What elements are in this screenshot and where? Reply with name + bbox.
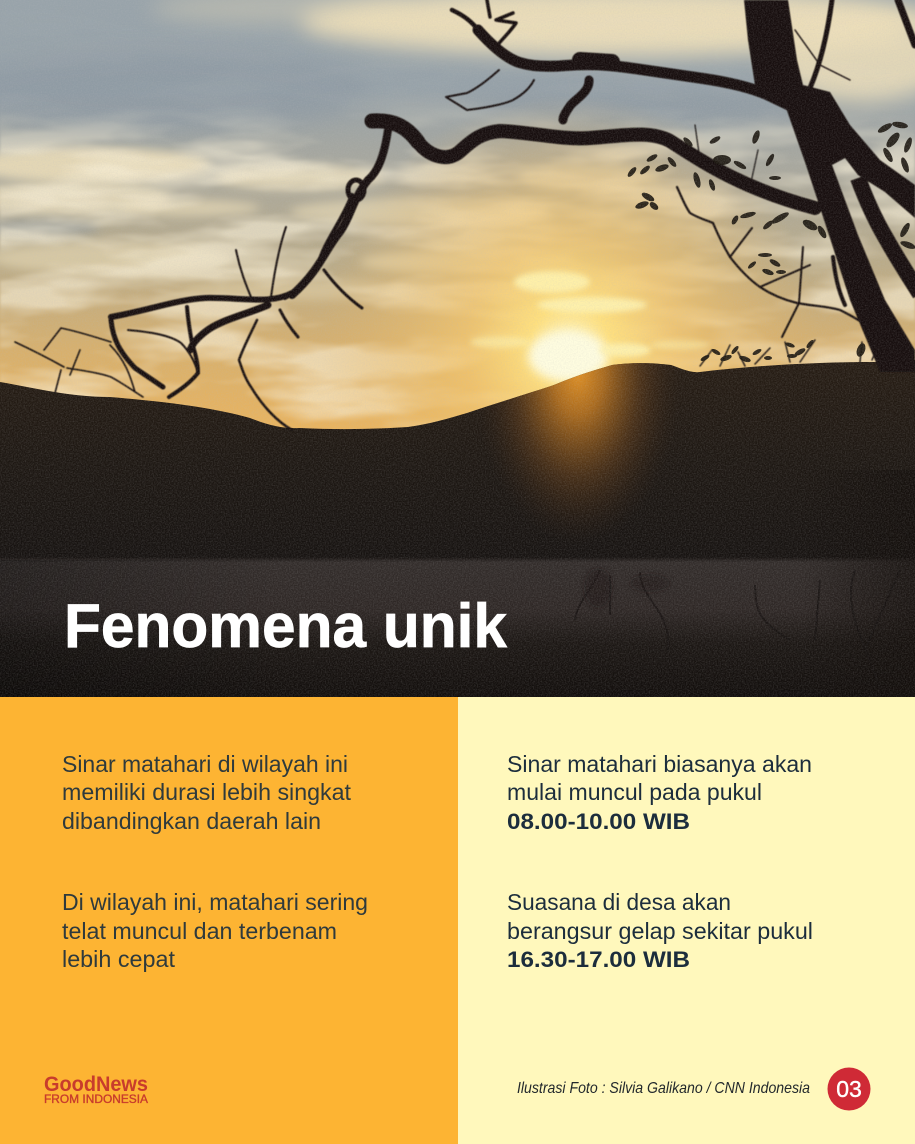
photo credit: Ilustrasi Foto : Silvia Galikano / CNN Indonesia	[517, 1080, 810, 1097]
page number badge: 03	[836, 1076, 862, 1102]
cloud streaks	[0, 108, 915, 428]
text block: dusk time: 16.30-17.00 WIB	[507, 947, 690, 972]
text block: shorter sunlight duration: dibandingkan daerah lain	[62, 808, 321, 834]
left and right shading	[0, 470, 915, 697]
text block: shorter sunlight duration	[62, 751, 351, 834]
text block: sun rises late and sets early: Di wilayah ini, matahari sering	[62, 889, 368, 915]
low twigs	[15, 328, 143, 397]
lower branch	[418, 131, 815, 208]
panel: right cream	[458, 697, 915, 1144]
text block: dusk time: Suasana di desa akan	[507, 889, 731, 915]
page number badge	[828, 1068, 870, 1110]
text block: shorter sunlight duration: memiliki durasi lebih singkat	[62, 779, 351, 805]
bush leaves	[700, 339, 867, 363]
right twig	[677, 187, 873, 330]
water reflection of tree	[575, 568, 900, 690]
sky	[0, 0, 915, 440]
text block: sunrise time: mulai muncul pada pukul	[507, 779, 762, 805]
logo: GoodNews from Indonesia: FROM INDONESIA	[44, 1094, 148, 1106]
sun glow	[230, 90, 915, 440]
bush twigs	[700, 340, 878, 366]
text block: sunrise time: 08.00-10.00 WIB	[507, 809, 690, 834]
hill glow	[250, 362, 875, 560]
text block: sun rises late and sets early	[62, 889, 368, 972]
photo: sunset over hills	[0, 0, 915, 697]
text block: dusk time	[507, 889, 813, 972]
panel: left orange	[0, 697, 458, 1144]
tree silhouette	[15, 0, 915, 430]
text block: sun rises late and sets early: lebih cepat	[62, 946, 175, 972]
text block: shorter sunlight duration: Sinar matahari di wilayah ini	[62, 751, 348, 777]
logo: GoodNews from Indonesia: GoodNews	[44, 1073, 148, 1096]
text block: sunrise time	[507, 751, 812, 834]
clouds	[0, 0, 915, 300]
leaves	[626, 121, 915, 363]
hill silhouette and water	[0, 360, 915, 697]
text block: sunrise time: Sinar matahari biasanya akan	[507, 751, 812, 777]
film grain	[0, 0, 915, 697]
title: Fenomena unik	[64, 592, 507, 661]
text block: sun rises late and sets early: telat muncul dan terbenam	[62, 918, 337, 944]
upper branch	[478, 30, 793, 107]
logo: GoodNews from Indonesia	[44, 1073, 148, 1106]
text block: dusk time: berangsur gelap sekitar pukul	[507, 918, 813, 944]
trunk	[744, 0, 915, 372]
